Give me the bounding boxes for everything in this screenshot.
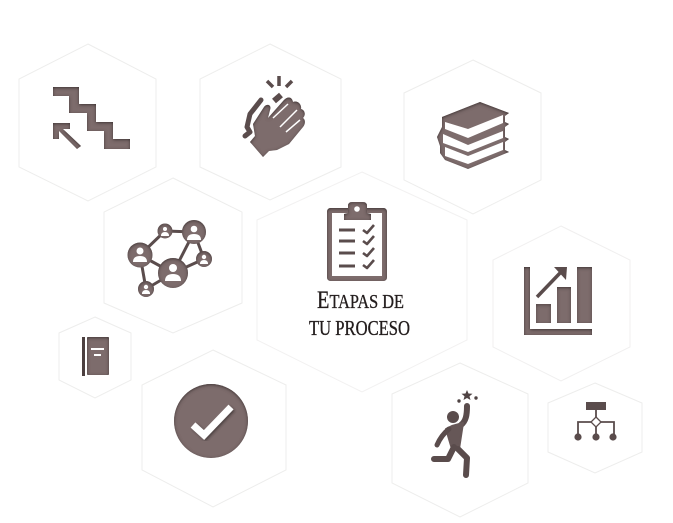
panel: growth chart xyxy=(493,226,630,381)
icon: stairs with arrow xyxy=(53,87,130,149)
panel: stairs xyxy=(19,44,156,201)
panel: achievement xyxy=(392,363,528,517)
hexagon: applause xyxy=(200,44,341,200)
icon: notebook xyxy=(82,337,109,376)
hexagon: central xyxy=(257,172,467,392)
icon: clipboard checklist xyxy=(327,202,387,281)
hexagon: growth chart xyxy=(493,226,630,381)
icon: check circle xyxy=(174,384,248,458)
hexagon: check xyxy=(142,350,286,507)
icon: people network xyxy=(128,220,212,297)
panel: applause xyxy=(200,44,341,200)
hexagon: stairs xyxy=(19,44,156,201)
icon: clapping hands xyxy=(245,76,305,157)
panel: check xyxy=(142,350,286,507)
icon: person reaching for a star xyxy=(434,390,478,475)
panel: central xyxy=(257,172,467,392)
title: ETAPAS DE xyxy=(317,287,421,314)
hexagon: flowchart xyxy=(548,383,642,473)
panel: books xyxy=(404,60,541,214)
panel: flowchart xyxy=(548,383,642,473)
panel: notebook xyxy=(59,317,131,398)
icon: stack of books xyxy=(437,102,509,169)
hexagon: network xyxy=(104,178,242,333)
panel: network xyxy=(104,178,242,333)
hexagon: achievement xyxy=(392,363,528,517)
hexagon: books xyxy=(404,60,541,214)
title: TU PROCESO xyxy=(309,316,410,340)
hexagon: notebook xyxy=(59,317,131,398)
icon: org chart xyxy=(574,402,617,441)
icon: bar chart with arrow xyxy=(524,267,592,335)
